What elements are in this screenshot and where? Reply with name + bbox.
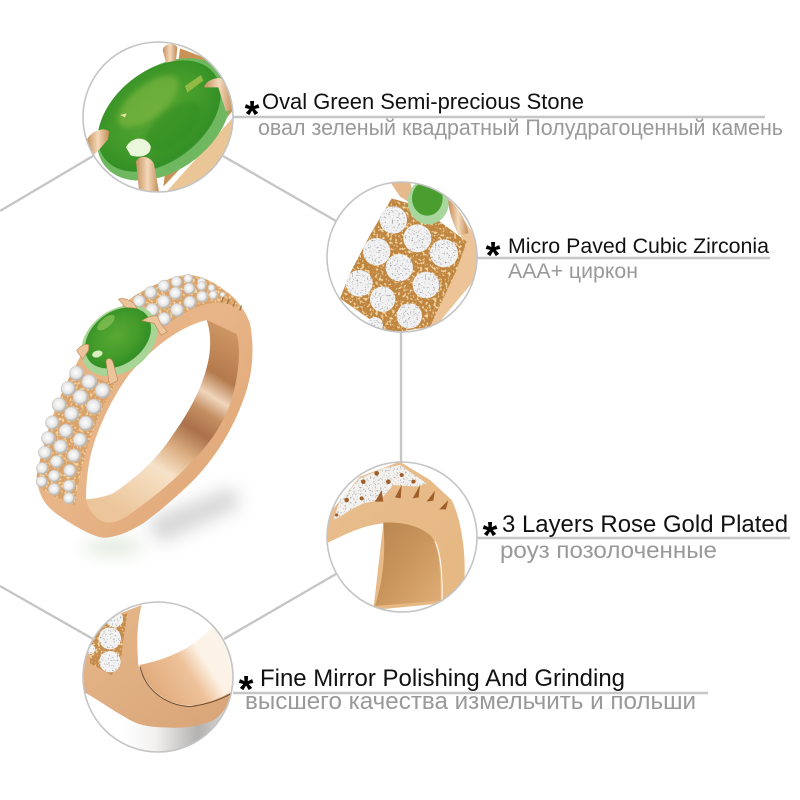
caption: mirror polishing: высшего качества измельчить и польши [245,688,696,715]
diamonds [36,274,225,504]
caption: mirror polishing: Fine Mirror Polishing And Grinding [260,665,625,692]
stone [98,58,230,180]
gold band [327,462,465,610]
caption: rose gold plated: * [483,515,498,557]
main ring illustration [36,274,252,553]
stone prongs [77,299,167,385]
caption: mirror polishing: * [239,669,254,711]
gold band [80,605,237,728]
ring inner surface [86,320,239,523]
caption: rose gold plated: роуз позолоченные [500,537,717,563]
pave bed [340,198,467,333]
caption: micro paved zirconia: AAA+ циркон [508,260,638,283]
detail circle: rose gold [327,462,477,612]
pave setting [37,370,115,505]
detail circle: green stone [82,41,234,193]
inner surface [139,626,237,706]
small diamonds [90,613,127,675]
ring outer band [37,275,252,538]
caption: oval green stone [245,89,783,140]
caption: rose gold plated [483,511,788,563]
ring shadow [83,487,240,553]
detail circle: zirconia [327,179,480,333]
inner surface [375,522,441,606]
small gem [408,184,449,224]
caption: oval green stone: овал зеленый квадратный Полудрагоценный камень [258,115,783,140]
caption: micro paved zirconia: Micro Paved Cubic Zirconia [508,234,769,258]
caption: mirror polishing [239,665,696,715]
gold shank [168,118,232,190]
plain gold edge [420,200,476,329]
caption: micro paved zirconia: * [486,235,501,277]
ring opening [86,320,210,499]
diamonds [346,206,458,333]
caption: oval green stone: Oval Green Semi-precious Stone [262,89,584,114]
edge notches [222,298,241,310]
caption: oval green stone: * [245,94,260,136]
detail circle: mirror polishing [80,602,237,753]
shadow below band [141,708,226,752]
caption: rose gold plated: 3 Layers Rose Gold Plated [502,511,788,538]
caption: micro paved zirconia [486,234,769,283]
prongs [163,44,177,63]
diamond edge [333,465,427,520]
connector lines [0,117,790,693]
green stone [67,291,171,391]
